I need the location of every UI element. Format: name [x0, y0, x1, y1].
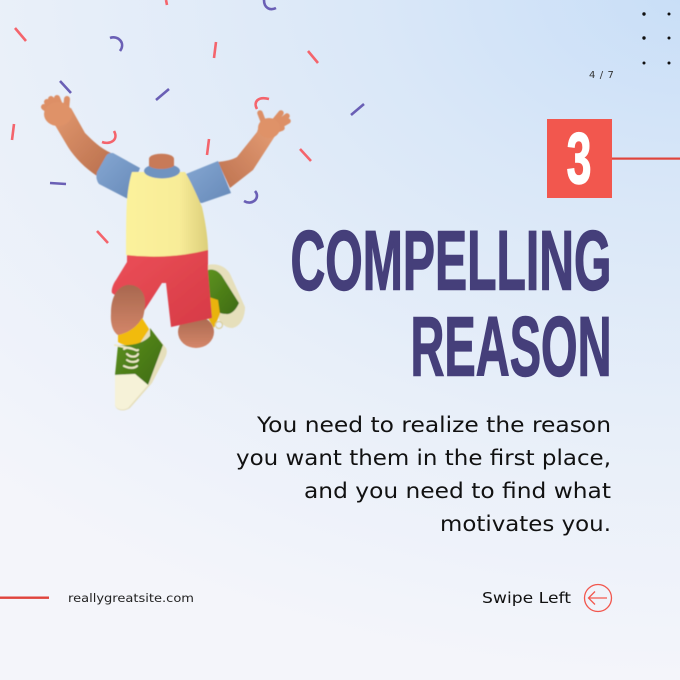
body text: You need to realize the reason	[256, 413, 611, 438]
website text: reallygreatsite.com	[68, 591, 194, 605]
character illustration: jumping headless figure	[44, 98, 288, 410]
body text: motivates you.	[440, 512, 611, 537]
body text: and you need to find what	[304, 479, 611, 504]
number badge: 3	[567, 118, 591, 199]
swipe label: Swipe Left	[482, 589, 571, 607]
shorts	[112, 248, 212, 327]
back shoe	[204, 264, 245, 328]
back knee	[178, 316, 214, 348]
confetti decoration	[12, 0, 364, 243]
left sleeve	[96, 153, 140, 199]
right sleeve	[186, 161, 231, 203]
shirt	[126, 172, 208, 257]
dot grid decoration	[642, 12, 670, 65]
body text: you want them in the first place,	[236, 446, 611, 471]
heading	[290, 214, 612, 394]
page counter: 4 / 7	[589, 70, 614, 81]
collar	[144, 164, 180, 178]
footer line	[0, 596, 49, 599]
badge connector line	[612, 158, 680, 160]
number badge	[547, 118, 612, 199]
front leg	[111, 285, 151, 346]
icon: left arrow in circle	[584, 584, 612, 612]
body text	[236, 413, 611, 537]
right arm and hand	[218, 113, 288, 188]
left arm and hand	[44, 98, 111, 176]
front shoe	[115, 328, 167, 410]
neck	[149, 154, 174, 169]
